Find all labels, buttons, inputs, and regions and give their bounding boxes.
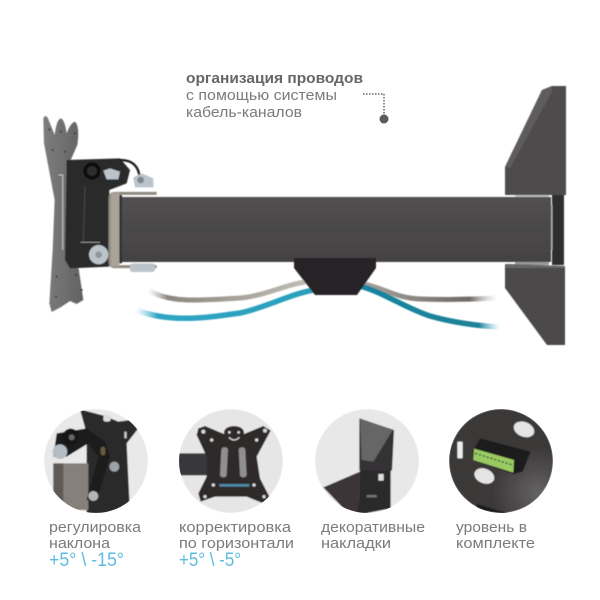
horizontal correction label: +5° \ -5° <box>179 550 241 571</box>
tilt body <box>65 158 130 268</box>
covers label <box>321 519 425 552</box>
main product photo: wall mount <box>43 86 566 345</box>
horizontal correction label <box>179 519 294 571</box>
callout leader line with dot <box>363 94 388 124</box>
feature: decorative covers <box>315 409 425 552</box>
feature: tilt adjustment <box>44 409 148 571</box>
silver U frame <box>110 193 157 267</box>
knob <box>83 162 101 180</box>
tilt label: наклона <box>49 535 111 552</box>
bracket arm <box>121 197 551 262</box>
callout text line 2: кабель-каналов <box>186 104 302 121</box>
level label <box>456 519 535 552</box>
horizontal correction label: по горизонтали <box>179 535 294 552</box>
horizontal correction label: корректировка <box>179 519 292 536</box>
tilt label: регулировка <box>49 519 142 536</box>
cable clip <box>294 258 376 295</box>
VESA plate <box>43 116 83 312</box>
callout: cable management <box>186 70 388 124</box>
covers photo <box>315 409 419 515</box>
tilt photo <box>44 409 148 513</box>
callout text line 1: с помощью системы <box>186 87 337 104</box>
tilt label: +5° \ -15° <box>49 550 124 571</box>
feature: included level <box>449 409 553 552</box>
covers label: декоративные <box>321 519 425 536</box>
level label: комплекте <box>456 535 535 552</box>
silver bolts <box>89 168 155 272</box>
tilt label <box>49 519 142 571</box>
level photo <box>449 409 553 515</box>
covers label: накладки <box>321 535 391 552</box>
wall plate <box>505 86 566 345</box>
tilt mount assembly <box>43 116 157 312</box>
VESA plate photo <box>178 409 283 513</box>
feature: horizontal correction <box>178 409 294 571</box>
cables <box>136 281 500 327</box>
level label: уровень в <box>456 519 527 536</box>
callout heading: организация проводов <box>186 70 363 87</box>
